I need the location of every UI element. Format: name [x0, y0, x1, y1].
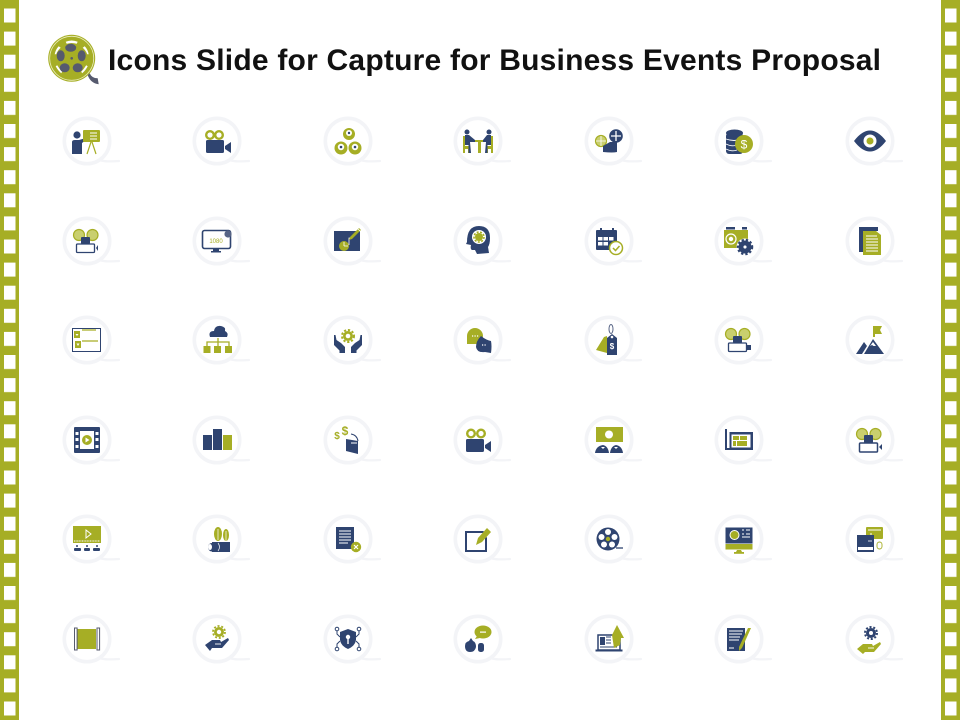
- icon: film projector: [64, 218, 119, 264]
- icon: screen with audience: [586, 417, 641, 463]
- icon: film reel: [586, 516, 641, 562]
- icon: hands holding gear: [325, 317, 380, 363]
- icon: thumbs up and comment: [455, 616, 510, 662]
- icon: chat bubbles: [455, 317, 510, 363]
- icon: design sheet with pencil: [325, 218, 380, 264]
- film strip: right: [941, 0, 960, 720]
- icon: cinema screen with seats: [64, 516, 119, 562]
- icon: cloud network: [194, 317, 249, 363]
- icon: film frame olive: [64, 616, 119, 662]
- icon: film projector: [716, 317, 771, 363]
- icon: coins with dollar: $: [741, 138, 748, 152]
- icon: calendar check: [586, 218, 641, 264]
- icon: video camera: [455, 417, 510, 463]
- icon: 1080 monitor: 1080: [209, 239, 223, 245]
- film strip: left: [0, 0, 19, 720]
- icon: team hierarchy: [325, 118, 380, 164]
- icon: projector reels: [586, 118, 641, 164]
- icon: hand with gear: [194, 616, 249, 662]
- icon: mountain with flag: [847, 317, 902, 363]
- icon: monitor with info: [716, 516, 771, 562]
- icon: document with pen: [716, 616, 771, 662]
- icon: gear in olive hand: [847, 616, 902, 662]
- icon: bar chart: [194, 417, 249, 463]
- icon: video camera: [194, 118, 249, 164]
- icon: dollars and book: $: [342, 424, 349, 438]
- icon: dollars and book: $: [334, 431, 340, 442]
- icon: laptop with arrow: [586, 616, 641, 662]
- icon: coins with dollar: [716, 118, 771, 164]
- icon: shield with key circuit: [325, 616, 380, 662]
- icon: two people at table: [455, 118, 510, 164]
- icon: camera with gear: [716, 218, 771, 264]
- icon: film reel logo: [48, 35, 99, 84]
- title: Icons Slide for Capture for Business Events Proposal: [108, 44, 881, 77]
- icon: eye: [847, 118, 902, 164]
- icon: checklist panel: [64, 317, 119, 363]
- icon: film frame with play: [64, 417, 119, 463]
- icon: film projector: [847, 417, 902, 463]
- icon: 1080 monitor: [194, 218, 249, 264]
- icon: head with gear: [455, 218, 510, 264]
- icon: presenter at board: [64, 118, 119, 164]
- icon: document with x badge: [325, 516, 380, 562]
- icon: documents: [847, 218, 902, 264]
- icon: blueprint: [716, 417, 771, 463]
- icon: price tags: $: [610, 342, 615, 351]
- icon: cine projector side view: [194, 516, 249, 562]
- icon: price tags: [586, 317, 641, 363]
- icon: dollars and book: [325, 417, 380, 463]
- icon: cards and wallet: [847, 516, 902, 562]
- icon: edit note: [455, 516, 510, 562]
